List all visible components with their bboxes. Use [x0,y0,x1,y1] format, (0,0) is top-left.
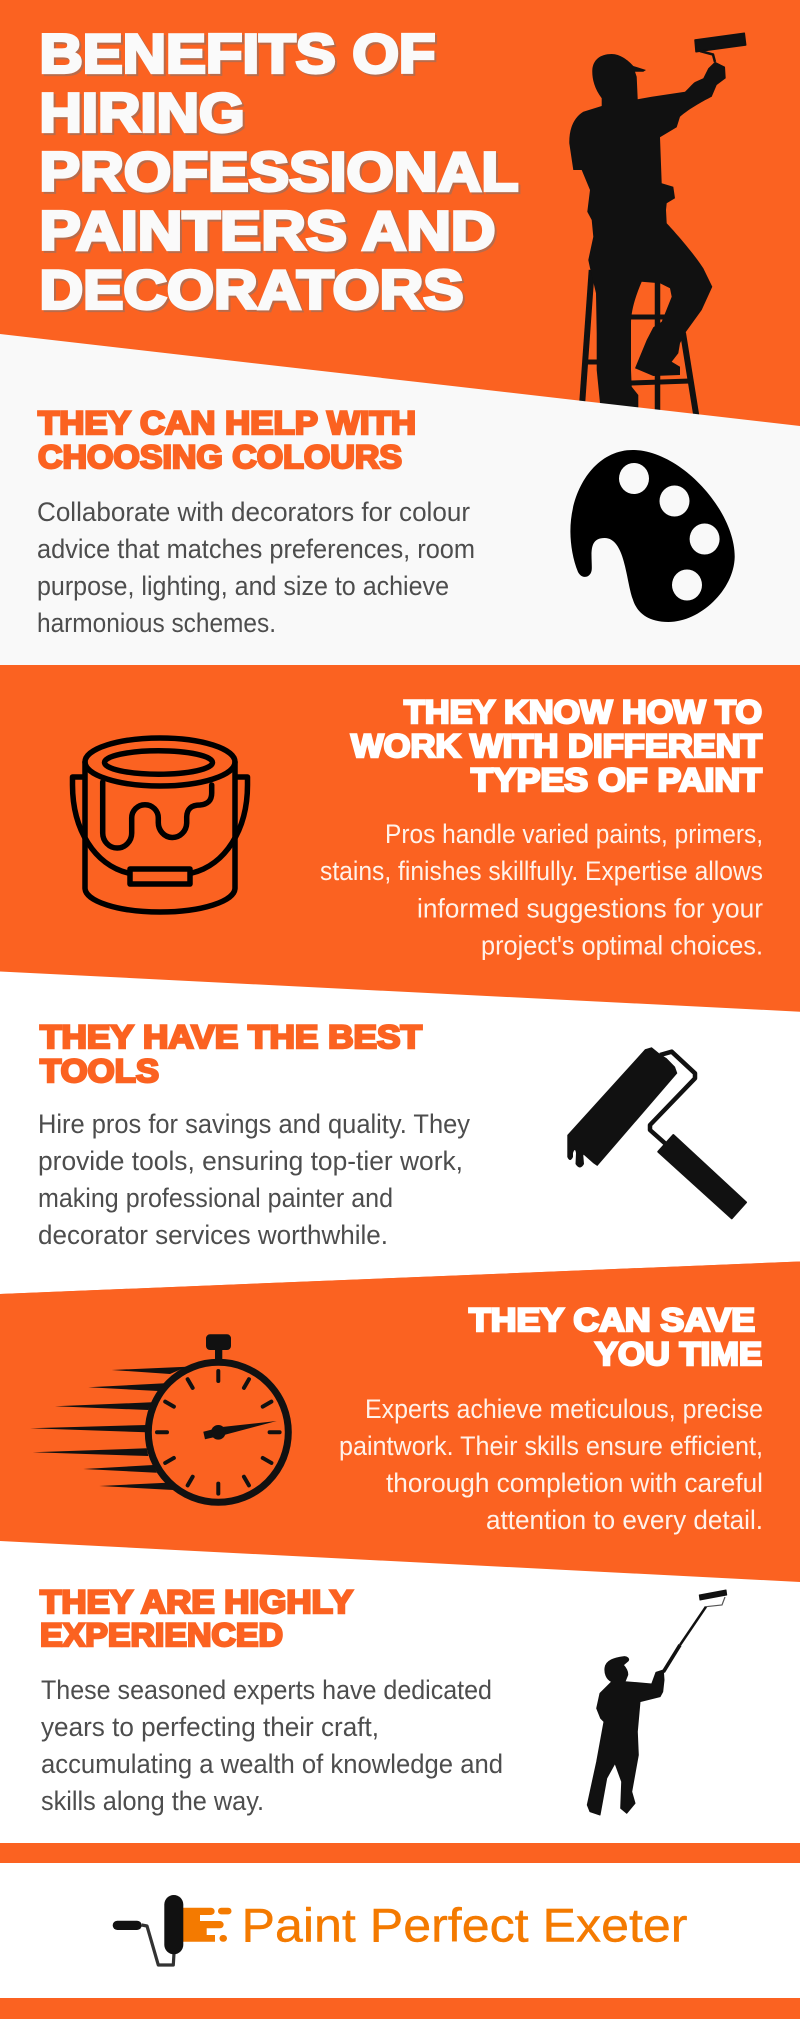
orange strip [0,1843,800,1863]
panel: types of paint [0,665,800,1012]
icon: paint roller [567,1047,746,1218]
title: PROFESSIONAL [40,140,518,202]
heading: types of paint [351,694,763,798]
panel: footer logo [0,1863,800,1998]
panel: best tools [0,972,800,1294]
panel: hero header [0,0,800,426]
text: choosing colours: purpose, lighting, and size to achieve [37,571,449,601]
text: save time [339,1394,763,1535]
heading: save time: THEY CAN SAVE [469,1302,755,1338]
text: types of paint: stains, finishes skillfully. Expertise allows [320,856,763,886]
heading: best tools [40,1019,422,1089]
text: types of paint: Pros handle varied paints, primers, [385,819,763,849]
text: types of paint: informed suggestions for your [417,894,763,924]
text: highly experienced: These seasoned experts have dedicated [41,1675,492,1705]
panel: choosing colours [0,334,800,665]
text: best tools: Hire pros for savings and quality. They [38,1109,470,1139]
text: best tools: provide tools, ensuring top-tier work, [38,1146,463,1176]
text: highly experienced: years to perfecting their craft, [41,1712,379,1742]
heading: highly experienced: EXPERIENCED [40,1617,283,1653]
heading: highly experienced [40,1584,353,1653]
text: highly experienced: skills along the way. [41,1786,264,1816]
text: choosing colours [37,497,475,638]
heading: best tools: THEY HAVE THE BEST [40,1019,422,1055]
icon: painter with extension pole [587,1590,727,1815]
text: best tools: decorator services worthwhile. [38,1220,388,1250]
text: best tools: making professional painter and [38,1183,393,1213]
text: choosing colours: advice that matches preferences, room [37,534,475,564]
heading: types of paint: WORK WITH DIFFERENT [351,728,762,764]
title [40,22,518,320]
heading: highly experienced: THEY ARE HIGHLY [40,1584,353,1620]
heading: save time [469,1302,762,1372]
bottom orange band [0,1998,800,2019]
text: types of paint [320,819,763,960]
text: highly experienced [41,1675,503,1816]
text: choosing colours: harmonious schemes. [37,608,276,638]
logo text: Paint Perfect Exeter [242,1898,688,1952]
panel: save time [0,1262,800,1582]
heading: choosing colours: THEY CAN HELP WITH [38,405,416,441]
heading: choosing colours [38,405,416,475]
title: BENEFITS OF [40,22,436,84]
icon: artist palette [570,450,735,622]
text: save time: Experts achieve meticulous, precise [365,1394,763,1424]
icon: logo paint roller [113,1895,232,1965]
heading: best tools: TOOLS [40,1053,159,1089]
text: best tools [38,1109,470,1250]
icon: painter on ladder silhouette [569,33,746,420]
heading: types of paint: THEY KNOW HOW TO [404,694,762,730]
text: types of paint: project's optimal choices. [481,930,763,960]
heading: choosing colours: CHOOSING COLOURS [38,439,402,475]
text: save time: attention to every detail. [486,1505,763,1535]
title: HIRING [40,82,244,144]
title: DECORATORS [40,258,464,320]
title: PAINTERS AND [40,200,496,262]
panel: highly experienced [0,1541,800,1843]
icon: stopwatch with speed lines [30,1334,288,1502]
icon: paint bucket [72,738,248,912]
text: highly experienced: accumulating a wealth of knowledge and [41,1749,503,1779]
text: save time: paintwork. Their skills ensure efficient, [339,1431,763,1461]
heading: types of paint: TYPES OF PAINT [471,762,763,798]
heading: save time: YOU TIME [595,1336,762,1372]
text: save time: thorough completion with careful [386,1468,763,1498]
text: choosing colours: Collaborate with decorators for colour [37,497,470,527]
